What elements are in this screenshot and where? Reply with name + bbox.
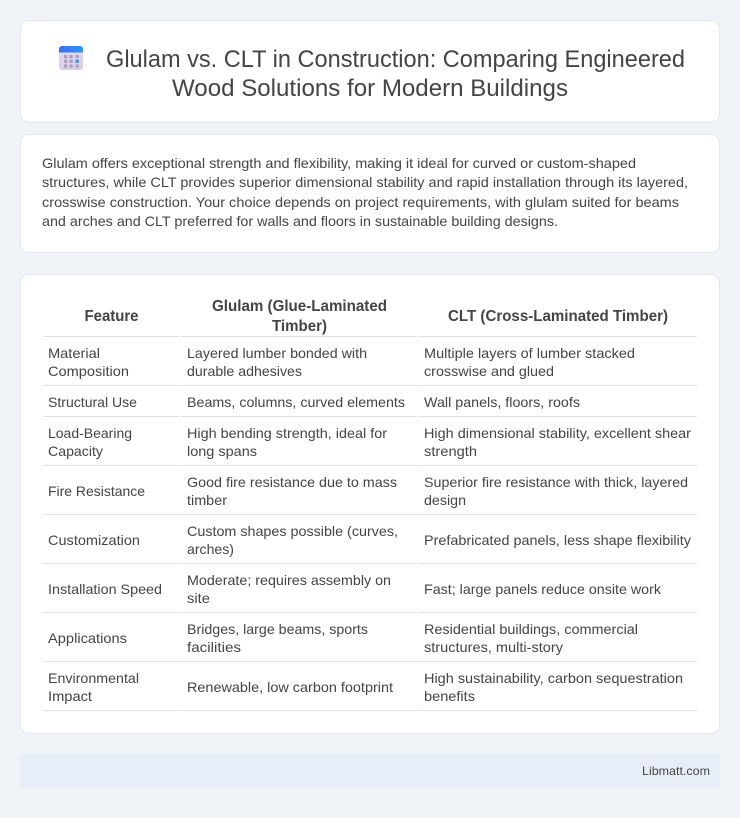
row: customization: Prefabricated panels, less shape flexibility (424, 532, 691, 548)
title (106, 46, 685, 102)
title: Wood Solutions for Modern Buildings (172, 75, 568, 102)
row: material composition: durable adhesives (187, 363, 302, 379)
panel: title card (20, 20, 720, 122)
row: customization: Customization (48, 532, 140, 548)
row: applications: Residential buildings, commercial (424, 621, 638, 637)
row: material composition (43, 345, 697, 386)
row: structural use: Wall panels, floors, roofs (424, 394, 580, 410)
row: installation speed: site (187, 590, 210, 606)
table header: Feature (84, 308, 139, 325)
row: fire resistance: Good fire resistance due to mass (187, 474, 397, 490)
panel: comparison table (20, 274, 720, 734)
row: installation speed: Installation Speed (48, 581, 162, 597)
table header (43, 298, 697, 336)
text block: summary paragraph: crosswise construction. Your choice depends on project requirements, with glulam suited for beams (42, 194, 679, 210)
row: structural use: Structural Use (48, 394, 137, 410)
row: fire resistance (43, 474, 697, 514)
row: installation speed (43, 572, 697, 612)
row: fire resistance: design (424, 492, 466, 508)
row: applications: Applications (48, 630, 127, 646)
icon: calendar table (59, 46, 83, 70)
row: structural use (43, 394, 697, 416)
footer: Libmatt.com (642, 764, 710, 778)
row: load-bearing capacity: Load-Bearing (48, 425, 132, 441)
table header: Timber) (272, 318, 327, 335)
row: environmental impact: High sustainability, carbon sequestration (424, 670, 683, 686)
row: environmental impact (43, 670, 697, 710)
row: installation speed: Fast; large panels reduce onsite work (424, 581, 662, 597)
row: applications: structures, multi-story (424, 639, 563, 655)
text block: summary paragraph: Glulam offers exceptional strength and flexibility, making it ideal for curved or custom-shaped (42, 155, 636, 171)
row: installation speed: Moderate; requires assembly on (187, 572, 391, 588)
row: load-bearing capacity: Capacity (48, 443, 103, 459)
title: Glulam vs. CLT in Construction: Comparing Engineered (106, 46, 685, 73)
row: environmental impact: Renewable, low carbon footprint (187, 679, 393, 695)
row: environmental impact: benefits (424, 688, 475, 704)
row: material composition: Composition (48, 363, 129, 379)
footer (20, 754, 720, 788)
row: material composition: crosswise and glued (424, 363, 554, 379)
row: load-bearing capacity (43, 425, 697, 466)
row: applications (43, 621, 697, 662)
row: customization: Custom shapes possible (curves, (187, 523, 398, 539)
row: applications: Bridges, large beams, sports (187, 621, 368, 637)
row: material composition: Material (48, 345, 100, 361)
row: customization (43, 523, 697, 564)
row: customization: arches) (187, 541, 234, 557)
row: material composition: Layered lumber bonded with (187, 345, 367, 361)
text block: summary paragraph: structures, while CLT provides superior dimensional stability and rapid installation through its layered, (42, 174, 688, 190)
panel: summary (20, 134, 720, 252)
table header: CLT (Cross-Laminated Timber) (448, 308, 668, 325)
row: fire resistance: Superior fire resistance with thick, layered (424, 474, 688, 490)
table header: Glulam (Glue-Laminated (212, 298, 387, 315)
row: environmental impact: Environmental (48, 670, 139, 686)
row: structural use: Beams, columns, curved elements (187, 394, 405, 410)
row: material composition: Multiple layers of lumber stacked (424, 345, 635, 361)
row: load-bearing capacity: High bending strength, ideal for (187, 425, 387, 441)
text block: summary paragraph: and arches and CLT preferred for walls and floors in sustainable building designs. (42, 213, 558, 229)
row: load-bearing capacity: long spans (187, 443, 257, 459)
row: fire resistance: timber (187, 492, 227, 508)
row: fire resistance: Fire Resistance (48, 483, 145, 499)
row: load-bearing capacity: High dimensional stability, excellent shear (424, 425, 691, 441)
row: environmental impact: Impact (48, 688, 92, 704)
row: applications: facilities (187, 639, 241, 655)
row: load-bearing capacity: strength (424, 443, 477, 459)
text block: summary paragraph (42, 155, 688, 229)
